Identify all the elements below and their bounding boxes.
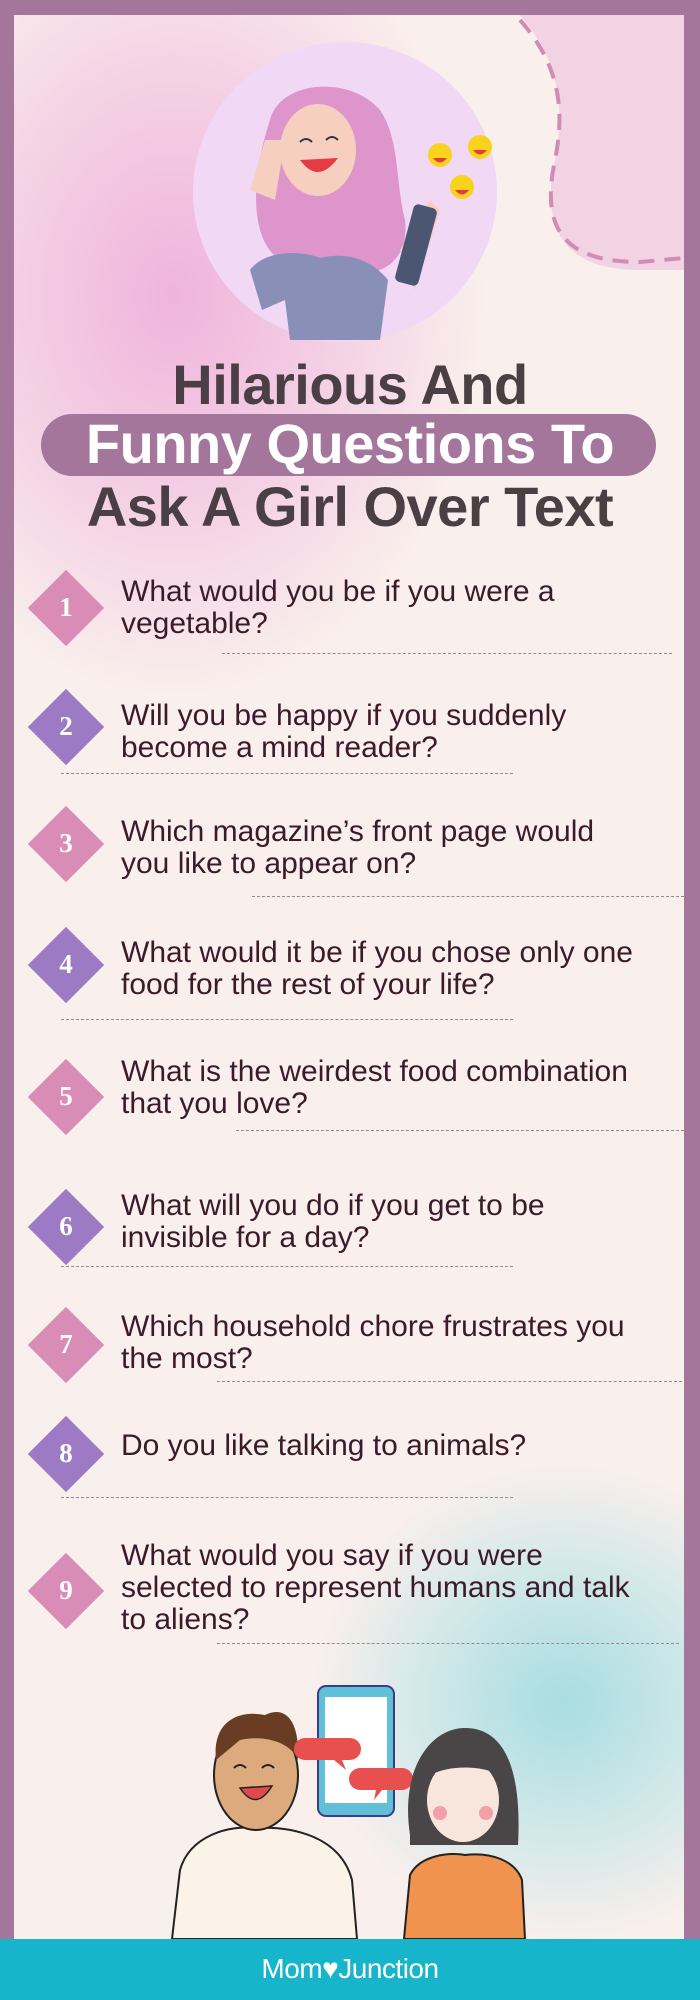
text: 9 (59, 1575, 73, 1605)
logo: Mom♥Junction (261, 1953, 439, 1984)
illustration: laughing girl with phone (193, 42, 497, 342)
text: 3 (59, 828, 73, 858)
text: 1 (59, 592, 73, 622)
item 7 (28, 1307, 682, 1383)
text: to aliens? (121, 1603, 249, 1636)
text: the most? (121, 1342, 253, 1375)
text: Do you like talking to animals? (121, 1429, 526, 1462)
item 6 (28, 1189, 545, 1267)
text: you like to appear on? (121, 847, 416, 880)
text: 2 (59, 711, 73, 741)
illustration: laughing couple with phone (171, 1685, 526, 1939)
item 1 (28, 570, 672, 654)
item 9 (28, 1539, 679, 1644)
title line 3: Ask A Girl Over Text (87, 475, 613, 538)
title line 1: Hilarious And (172, 353, 528, 416)
text: 7 (59, 1329, 73, 1359)
item 8 (28, 1416, 526, 1498)
text: vegetable? (121, 607, 268, 640)
text: 6 (59, 1211, 73, 1241)
text: 4 (59, 949, 73, 979)
text: selected to represent humans and talk (121, 1571, 630, 1604)
text: What would you be if you were a (121, 575, 555, 608)
text: food for the rest of your life? (121, 968, 495, 1001)
footer bar (0, 1939, 700, 2000)
decorative pink blob top right (518, 15, 684, 270)
title pill (41, 414, 656, 476)
text: What would you say if you were (121, 1539, 543, 1572)
item 2 (28, 689, 566, 774)
text: Will you be happy if you suddenly (121, 699, 566, 732)
title line 2: Funny Questions To (86, 412, 614, 475)
text: What is the weirdest food combination (121, 1055, 628, 1088)
item 4 (28, 927, 633, 1020)
text: What will you do if you get to be (121, 1189, 545, 1222)
title (41, 353, 656, 538)
text: 8 (59, 1438, 73, 1468)
text: Which household chore frustrates you (121, 1310, 625, 1343)
text: What would it be if you chose only one (121, 936, 633, 969)
text: Which magazine’s front page would (121, 815, 594, 848)
text: 5 (59, 1081, 73, 1111)
item 5 (28, 1055, 684, 1135)
text: become a mind reader? (121, 731, 438, 764)
text: that you love? (121, 1087, 308, 1120)
item 3 (28, 806, 684, 897)
text: invisible for a day? (121, 1221, 369, 1254)
